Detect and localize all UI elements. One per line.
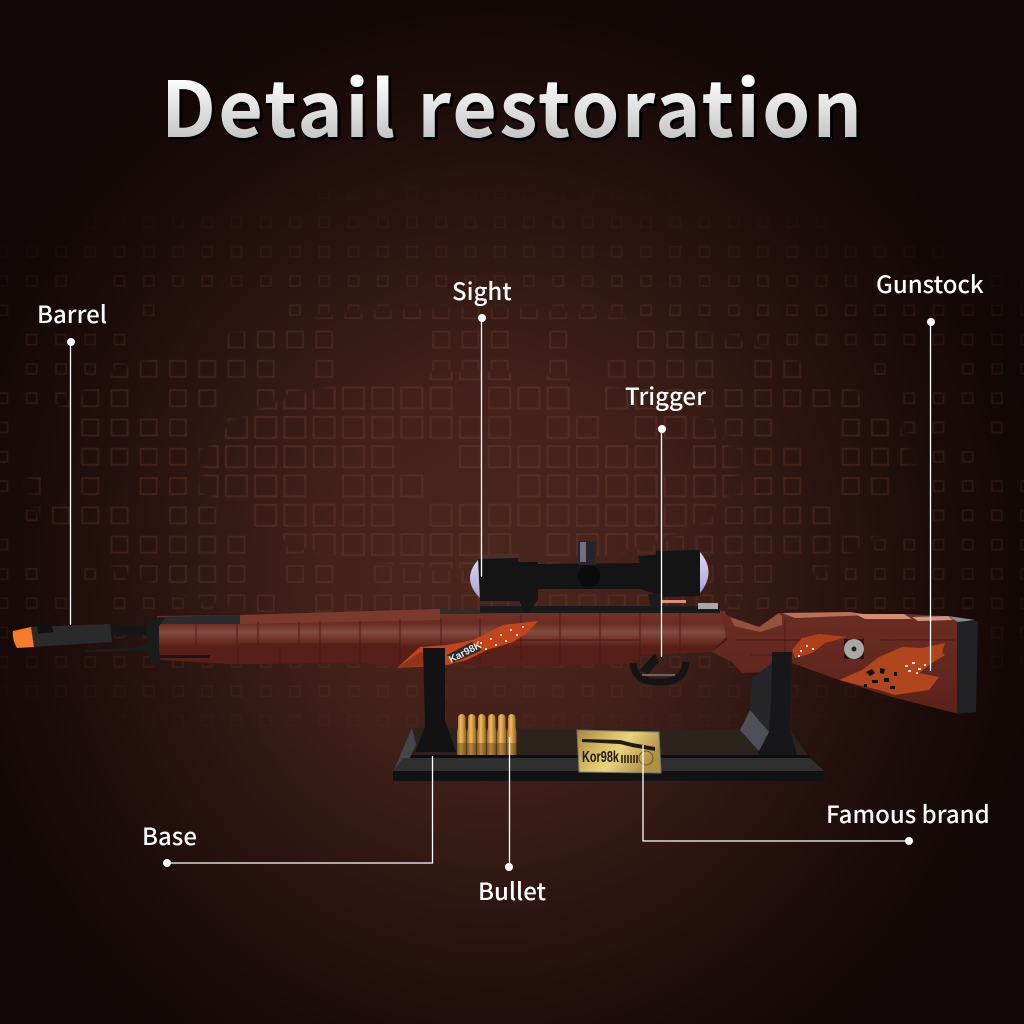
callout: Base: Base [142, 817, 197, 852]
callout: Bullet: Bullet [478, 872, 547, 907]
callout: Trigger: Trigger [625, 377, 706, 412]
rifle [13, 541, 978, 714]
gunstock [712, 610, 978, 714]
bullets [457, 714, 516, 755]
brand plaque [577, 730, 661, 773]
right stand [740, 652, 797, 755]
handguard [146, 600, 727, 667]
callout: Famous brand [643, 745, 990, 845]
trigger [633, 653, 686, 682]
barrel camo decal: Kar98K [447, 640, 484, 666]
display base [393, 648, 824, 781]
callout: Bullet [478, 737, 547, 907]
barrel camo decal [397, 621, 538, 668]
callout: Sight: Sight [452, 272, 512, 307]
background square grid pattern [0, 226, 1024, 691]
scope [470, 541, 708, 612]
callout: Base [142, 756, 432, 867]
callout: Gunstock: Gunstock [876, 265, 984, 300]
callout: Trigger [625, 377, 706, 657]
callout: Famous brand: Famous brand [826, 795, 990, 830]
callout: Barrel: Barrel [37, 295, 107, 330]
base plate [393, 728, 824, 781]
barrel [13, 623, 148, 652]
title: Detail restoration [161, 49, 862, 160]
callout: Sight [452, 272, 512, 577]
callout: Barrel [37, 295, 107, 625]
left stand [415, 648, 456, 752]
title: Detail restoration [163, 51, 864, 162]
callout: Gunstock [876, 265, 984, 671]
brand plaque: Kor98k [582, 749, 619, 766]
